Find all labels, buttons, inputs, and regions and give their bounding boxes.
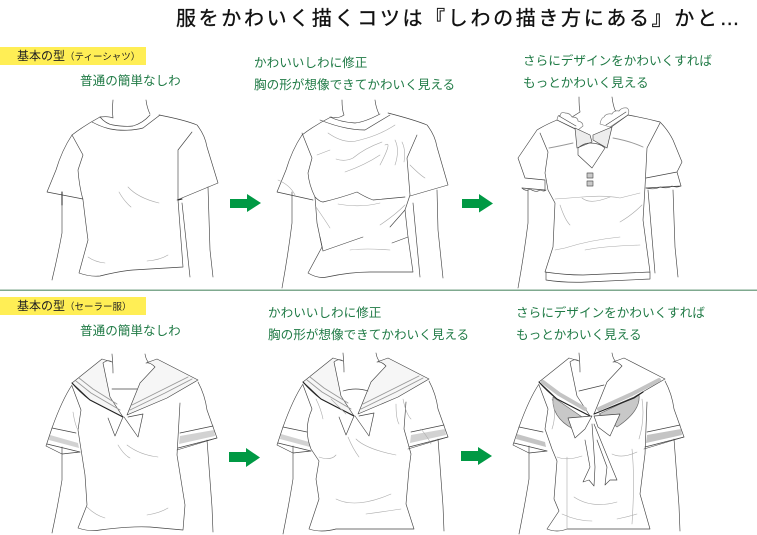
caption: T-shirt cute wrinkles: 胸の形が想像できてかわいく見える [254, 78, 455, 92]
illustration: plain sailor uniform [46, 354, 217, 533]
caption: T-shirt cute wrinkles: かわいいしわに修正 [254, 56, 367, 70]
illustration: T-shirt with cute wrinkles [277, 100, 448, 288]
label: basic sailor uniform: 基本の型（セーラー服） [17, 299, 132, 313]
caption: sailor cute design: さらにデザインをかわいくすれば [516, 306, 705, 320]
label: basic sailor uniform [0, 297, 146, 315]
caption: T-shirt plain: 普通の簡単なしわ [80, 74, 181, 88]
arrow: row 1 second [462, 194, 493, 212]
caption: sailor cute wrinkles [268, 306, 469, 342]
label: basic T-shirt: 基本の型（ティーシャツ） [17, 49, 140, 63]
caption: T-shirt cute design: さらにデザインをかわいくすれば [523, 54, 712, 68]
caption: sailor plain: 普通の簡単なしわ [80, 324, 181, 338]
arrow: row 2 second [461, 447, 492, 465]
caption: sailor cute design [516, 306, 705, 342]
illustration: sailor uniform with long ribbon [513, 353, 684, 534]
caption: T-shirt cute wrinkles [254, 56, 455, 92]
illustration: plain T-shirt [47, 100, 218, 280]
caption: sailor cute wrinkles: 胸の形が想像できてかわいく見える [268, 328, 469, 342]
caption: sailor cute design: もっとかわいく見える [516, 328, 642, 342]
caption: T-shirt cute design [523, 54, 712, 90]
label: basic T-shirt [0, 47, 146, 65]
arrow: row 1 first [230, 194, 261, 212]
arrow: row 2 first [229, 448, 260, 467]
title: 服をかわいく描くコツは『しわの描き方にある』かと… [176, 8, 742, 30]
illustration: sailor uniform with cute wrinkles [277, 353, 448, 534]
caption: sailor cute wrinkles: かわいいしわに修正 [268, 306, 381, 320]
caption: T-shirt cute design: もっとかわいく見える [523, 76, 649, 90]
illustration: T-shirt with frills and bow [518, 97, 682, 288]
